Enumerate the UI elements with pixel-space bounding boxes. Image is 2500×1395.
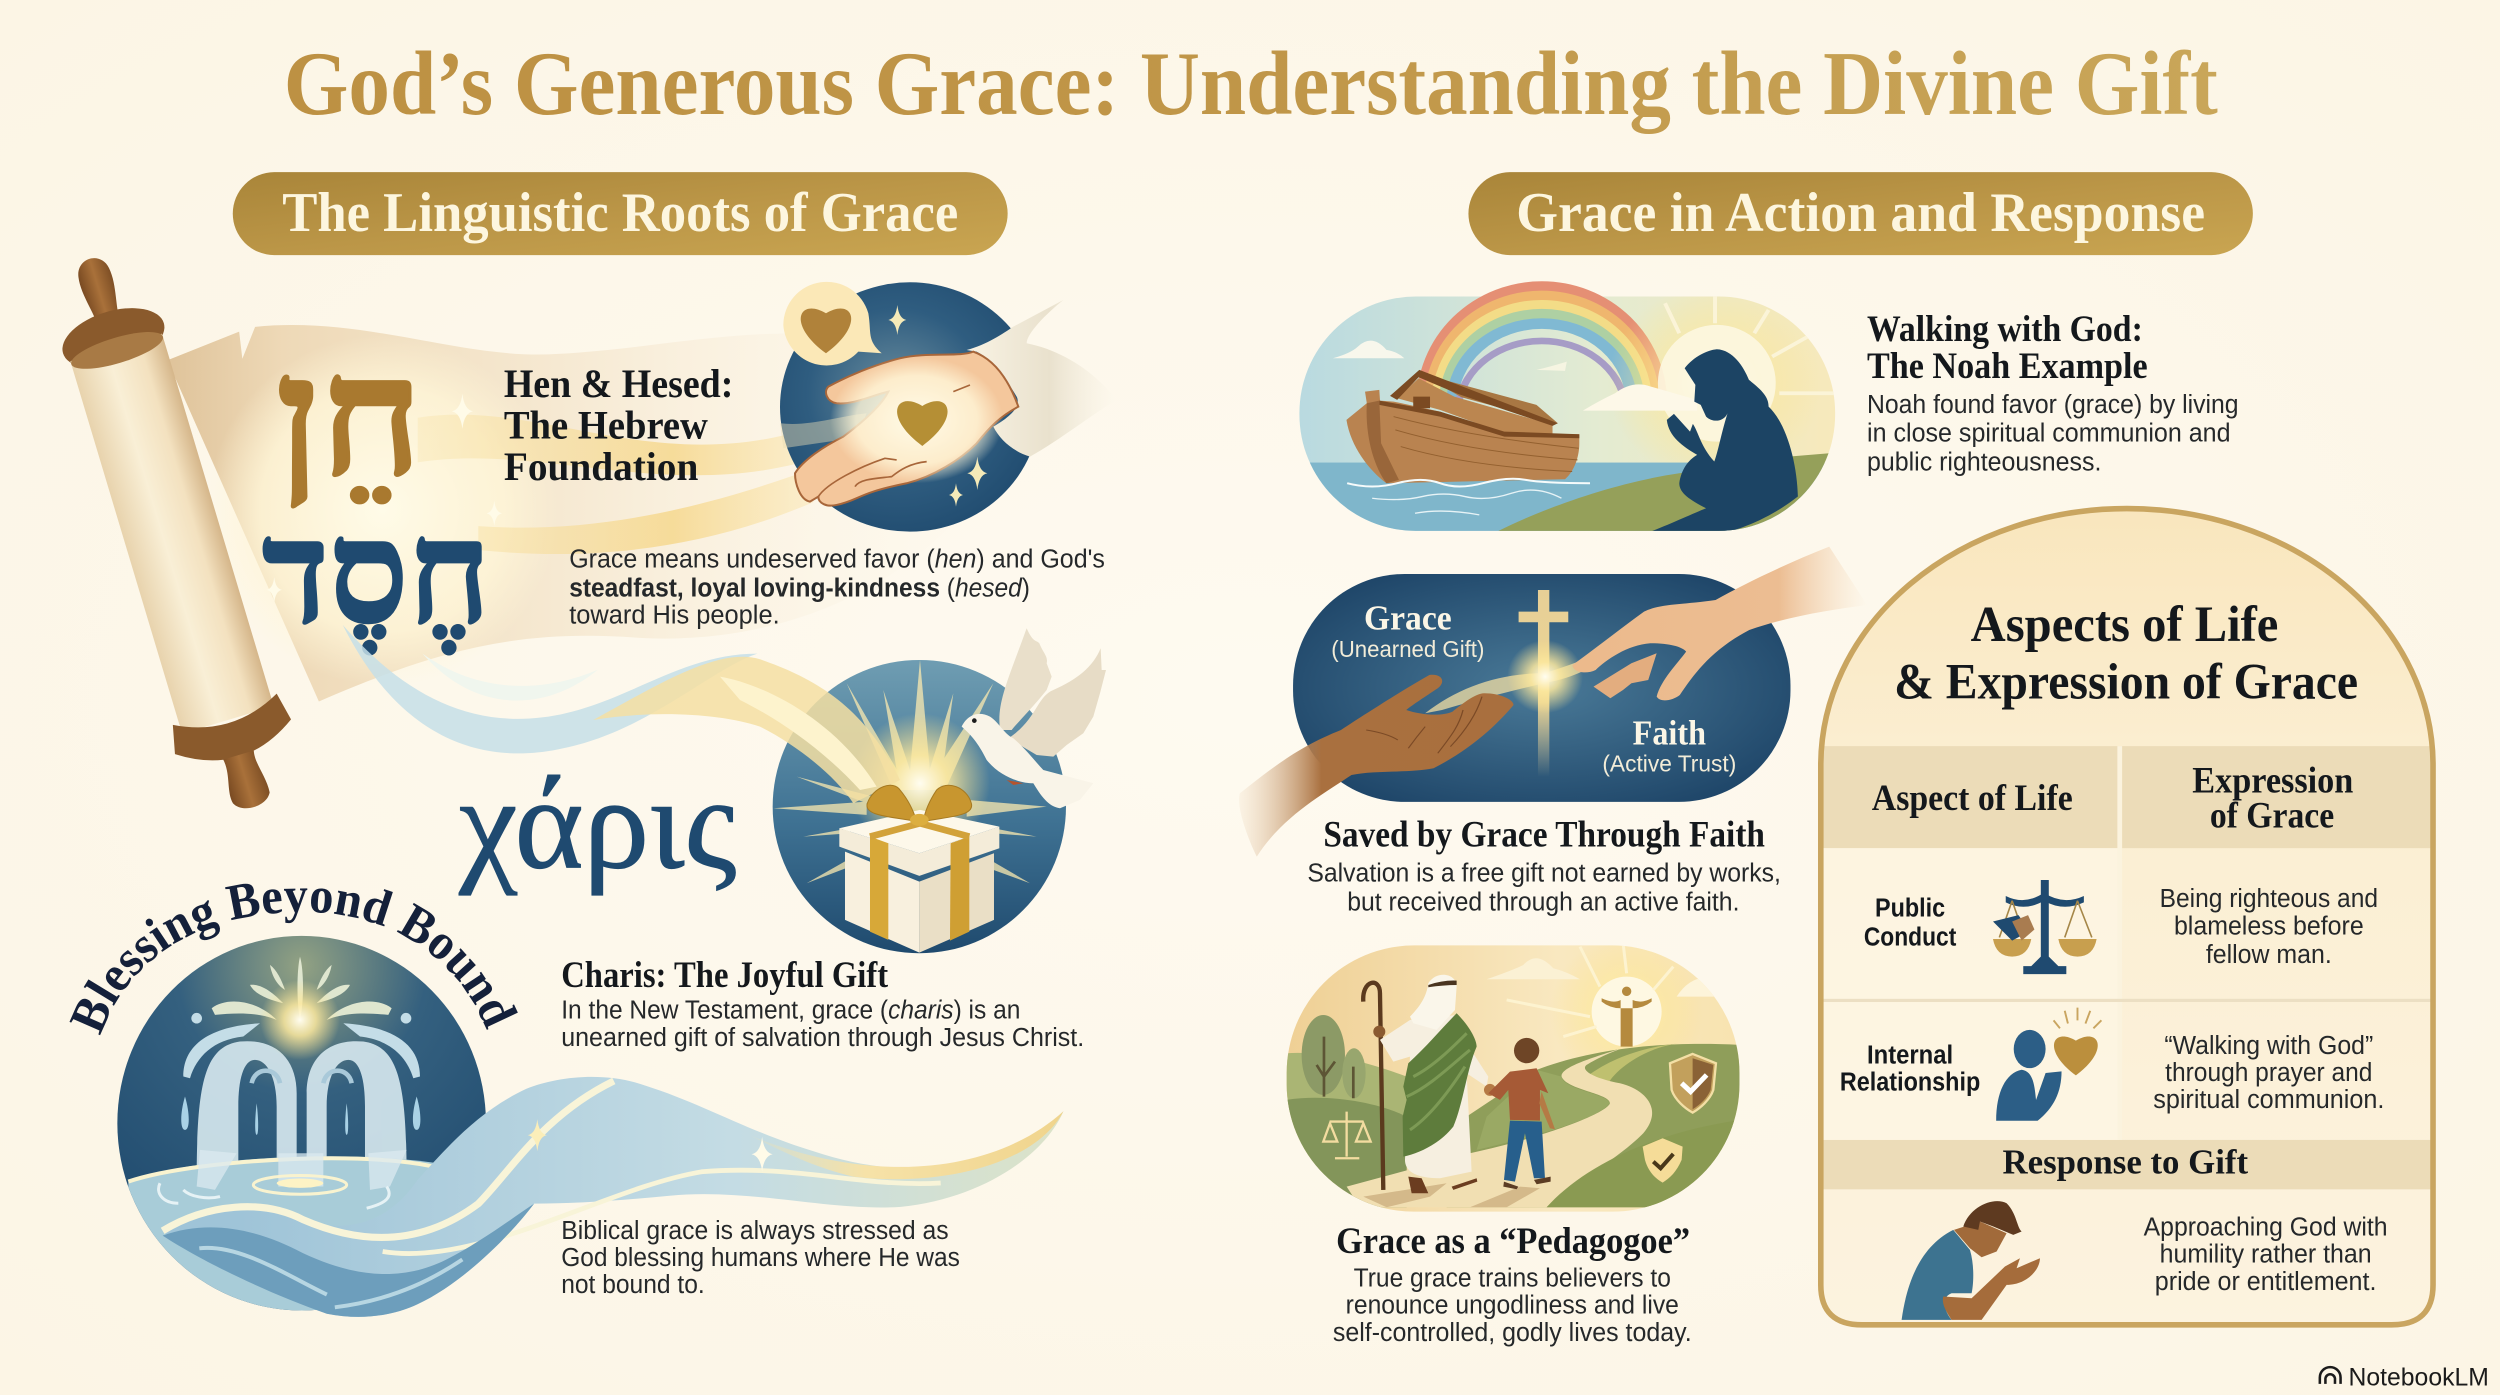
row label: internal relationship — [1840, 1041, 1980, 1096]
text: blessing description: not bound to. — [561, 1269, 705, 1299]
row label: public conduct: Conduct — [1864, 923, 1957, 951]
pool — [128, 1156, 434, 1310]
row text: being righteous — [2160, 883, 2378, 969]
logo: NotebookLM: NotebookLM — [2349, 1364, 2489, 1391]
illustration: pedagogue journey — [1286, 935, 1747, 1212]
label: grace: Grace — [1364, 599, 1452, 638]
heading: Hen & Hesed: Hen & Hesed: — [504, 361, 733, 406]
text: saved description: Salvation is a free gift not earned by works, — [1307, 858, 1781, 888]
illustration: fountain and waves — [117, 936, 1063, 1320]
dove — [962, 628, 1106, 808]
panel: aspects of life table — [1821, 509, 2433, 1325]
golden streams to hand — [267, 394, 821, 603]
text: Noah description: in close spiritual communion and — [1867, 418, 2231, 448]
praying silhouette — [1651, 349, 1798, 532]
text: charis description — [561, 995, 1084, 1052]
column header: expression of grace: of Grace — [2210, 794, 2334, 835]
icon: humble person praying — [1902, 1201, 2040, 1320]
row text: being righteous: fellow man. — [2206, 939, 2332, 969]
hebrew word: hen: חֵן — [276, 325, 422, 510]
text: blessing description: God blessing humans where He was — [561, 1242, 960, 1272]
row label: internal relationship: Internal — [1867, 1041, 1953, 1069]
heading: The Linguistic Roots of Grace: The Linguistic Roots of Grace — [282, 182, 958, 244]
text: pedagogue description — [1333, 1263, 1692, 1347]
heading: Saved by Grace: Saved by Grace Through Faith — [1323, 814, 1765, 855]
title: God’s Generous Grace: Understanding the Divine Gift — [284, 33, 2218, 134]
label: faith — [1602, 714, 1736, 777]
row text: being righteous: blameless before — [2174, 910, 2364, 940]
shepherd teacher — [1363, 975, 1496, 1193]
row text: approaching god: Approaching God with — [2144, 1212, 2388, 1242]
text: Noah description — [1867, 389, 2239, 476]
illustration: giving hand with heart — [780, 282, 1117, 532]
text: blessing description — [561, 1215, 960, 1299]
heading: Noah example — [1867, 308, 2148, 386]
child — [1488, 1038, 1555, 1189]
text: charis description: unearned gift of salvation through Jesus Christ. — [561, 1022, 1084, 1052]
column header: expression of grace: Expression — [2192, 759, 2353, 800]
flowing streams to gift — [343, 625, 757, 753]
heading: Grace in Action and Response — [1468, 172, 2253, 255]
row label: public conduct: Public — [1875, 895, 1945, 923]
text: blessing description: Biblical grace is always stressed as — [561, 1215, 949, 1245]
row text: approaching god: humility rather than — [2160, 1239, 2372, 1269]
arches — [196, 1041, 406, 1166]
reaching hand — [1572, 547, 1867, 700]
panel: linguistic roots — [62, 258, 1106, 1317]
text: saved description: but received through an active faith. — [1347, 886, 1739, 916]
cross — [1519, 590, 1568, 777]
word: charis: χάρις — [458, 752, 737, 896]
heading: Noah example: The Noah Example — [1867, 345, 2148, 386]
text: pedagogue description: self-controlled, godly lives today. — [1333, 1317, 1692, 1347]
text: hen and hesed description: steadfast, loyal loving-kindness (hesed) — [569, 572, 1030, 602]
illustration: gift box and dove — [593, 628, 1106, 953]
row heading: response to gift: Response to Gift — [2003, 1142, 2248, 1181]
panel heading: Aspects of Life — [1971, 597, 2278, 653]
row text: walking with god: spiritual communion. — [2153, 1084, 2384, 1114]
heading: Charis: Charis: The Joyful Gift — [561, 954, 889, 995]
label: grace — [1331, 599, 1484, 662]
table bands — [1821, 746, 2433, 1189]
receiving hand — [1239, 675, 1514, 857]
rainbow — [1422, 287, 1661, 403]
fingers behind — [1594, 653, 1657, 698]
golden stream — [593, 657, 900, 803]
row text: approaching god — [2144, 1212, 2388, 1296]
row text: approaching god: pride or entitlement. — [2155, 1266, 2376, 1296]
heading: The Linguistic Roots of Grace — [233, 172, 1008, 255]
label: grace: (Unearned Gift) — [1331, 636, 1484, 662]
panel heading — [1894, 597, 2358, 710]
illustration: Noah ark and rainbow — [1299, 283, 1836, 533]
curved label: Blessing Beyond Bound: Blessing Beyond Bound — [70, 884, 518, 1036]
label: faith: Faith — [1633, 714, 1706, 753]
text: saved description — [1307, 858, 1781, 916]
heading: Hen & Hesed — [504, 361, 733, 489]
speech bubble heart — [783, 282, 882, 365]
text: Noah description: Noah found favor (grace) by living — [1867, 389, 2239, 419]
text: pedagogue description: renounce ungodliness and live — [1346, 1290, 1679, 1320]
panel: grace in action — [1239, 283, 2239, 1347]
row text: walking with god: through prayer and — [2165, 1057, 2372, 1087]
icon: scales — [1993, 880, 2097, 974]
illustration: grace and faith hands — [1239, 547, 1867, 857]
scales — [1323, 1112, 1371, 1158]
light rays — [773, 660, 1047, 883]
row text: being righteous: Being righteous and — [2160, 883, 2378, 913]
hebrew word: hesed: חֶסֶד — [262, 494, 491, 654]
column header: expression of grace — [2192, 759, 2353, 835]
text: hen and hesed description: Grace means undeserved favor (hen) and God's — [569, 544, 1105, 574]
waves — [163, 1077, 1063, 1317]
heading: Grace in Action and Response: Grace in Action and Response — [1516, 182, 2205, 244]
label: faith: (Active Trust) — [1602, 751, 1736, 777]
row text: walking with god: “Walking with God” — [2164, 1030, 2373, 1060]
text: Noah description: public righteousness. — [1867, 446, 2101, 476]
gift box — [839, 785, 999, 953]
heading: Hen & Hesed: Foundation — [504, 444, 698, 489]
heading: Hen & Hesed: The Hebrew — [504, 402, 708, 447]
row label: public conduct — [1864, 895, 1957, 951]
row label: internal relationship: Relationship — [1840, 1068, 1980, 1096]
ark — [1346, 370, 1590, 515]
text: pedagogue description: True grace trains believers to — [1354, 1263, 1671, 1293]
shields — [1670, 1054, 1716, 1113]
text: hen and hesed description: toward His people. — [569, 599, 780, 629]
panel heading: & Expression of Grace — [1894, 654, 2358, 710]
row text: walking with god — [2153, 1030, 2384, 1114]
illustration: parchment scroll — [32, 241, 989, 824]
heading: pedagogue: Grace as a “Pedagogoe” — [1336, 1220, 1690, 1261]
icon: person and heart — [1996, 1008, 2101, 1121]
heading: Noah example: Walking with God: — [1867, 308, 2143, 349]
text: charis description: In the New Testament, grace (charis) is an — [561, 995, 1020, 1025]
column header: aspect of life: Aspect of Life — [1872, 777, 2073, 818]
text: hen and hesed description — [569, 544, 1105, 629]
